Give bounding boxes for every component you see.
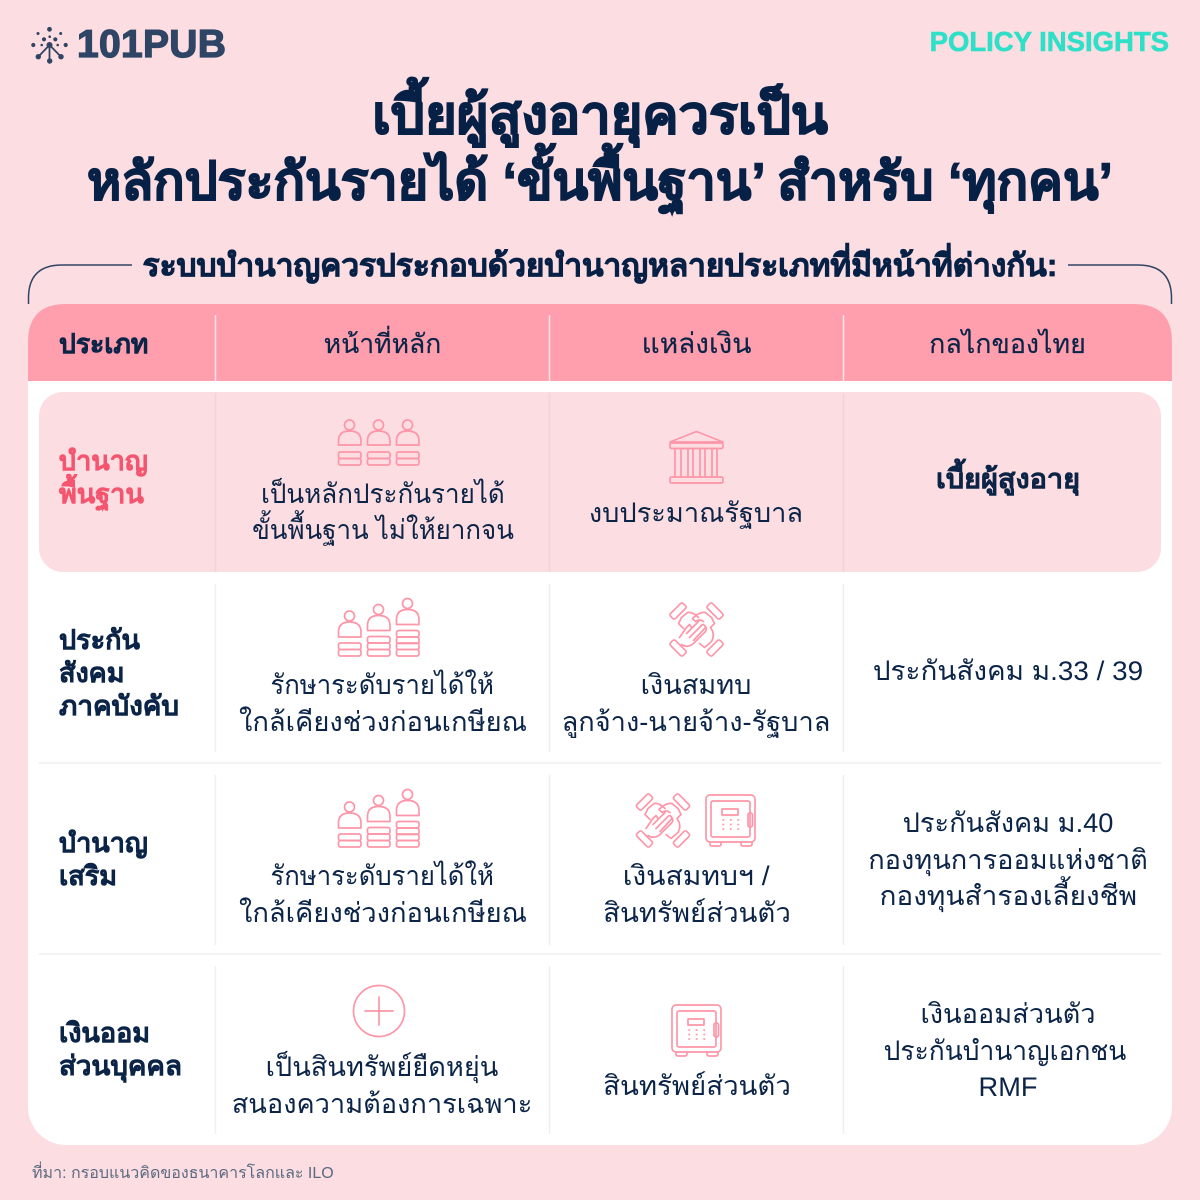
row 3 function text: ใกล้เคียงช่วงก่อนเกษียณ bbox=[239, 897, 526, 928]
row 2 funding text bbox=[562, 669, 830, 738]
title: เบี้ยผู้สูงอายุควรเป็น bbox=[372, 87, 828, 145]
row 4 funding text: สินทรัพย์ส่วนตัว bbox=[603, 1070, 790, 1101]
row 3 Thai mechanism bbox=[868, 807, 1148, 912]
row 1 funding text: งบประมาณรัฐบาล bbox=[589, 497, 803, 528]
row 1 Thai mechanism: เบี้ยผู้สูงอายุ bbox=[936, 463, 1080, 494]
row 2 Thai mechanism: ประกันสังคม ม.33 / 39 bbox=[872, 655, 1143, 686]
row 3 funding text bbox=[603, 860, 790, 928]
row 2 label: ประกัน bbox=[59, 625, 140, 655]
row 1 function text: เป็นหลักประกันรายได้ bbox=[261, 478, 504, 508]
row 3 label bbox=[59, 828, 148, 891]
row 4 label: เงินออม bbox=[59, 1018, 150, 1048]
row 3 Thai mechanism: ประกันสังคม ม.40 bbox=[903, 807, 1113, 838]
row 4 function text bbox=[232, 1050, 532, 1119]
table header: แหล่งเงิน bbox=[642, 328, 751, 359]
label: Policy Insights: POLICY INSIGHTS bbox=[930, 26, 1169, 57]
row 1 label bbox=[58, 446, 148, 512]
row 3 funding text: สินทรัพย์ส่วนตัว bbox=[603, 897, 790, 928]
row 2 function text: รักษาระดับรายได้ให้ bbox=[271, 669, 494, 700]
subtitle: ระบบบำนาญควรประกอบด้วยบำนาญหลายประเภทที่มีหน้าที่ต่างกัน: bbox=[143, 247, 1057, 283]
row 3 label: เสริม bbox=[59, 861, 117, 891]
row 4 function text: สนองความต้องการเฉพาะ bbox=[232, 1088, 532, 1119]
row 3 function text: รักษาระดับรายได้ให้ bbox=[271, 860, 494, 891]
row 4 label bbox=[59, 1018, 182, 1083]
row 4 Thai mechanism: ประกันบำนาญเอกชน bbox=[884, 1034, 1126, 1066]
row 3 function text bbox=[239, 860, 526, 928]
row 4 function text: เป็นสินทรัพย์ยืดหยุ่น bbox=[266, 1051, 498, 1082]
table header: กลไกของไทย bbox=[929, 329, 1086, 359]
row 1 label: พื้นฐาน bbox=[59, 479, 144, 509]
row 1 function text: ขั้นพื้นฐาน ไม่ให้ยากจน bbox=[252, 514, 513, 545]
row 3 funding text: เงินสมทบฯ / bbox=[623, 860, 770, 891]
row 4 label: ส่วนบุคคล bbox=[59, 1051, 182, 1081]
title: หลักประกันรายได้ ‘ขั้นพื้นฐาน’ สำหรับ ‘ทุกคน’ bbox=[87, 153, 1113, 211]
row 4 Thai mechanism: เงินออมส่วนตัว bbox=[920, 998, 1096, 1029]
row 3 Thai mechanism: กองทุนการออมแห่งชาติ bbox=[868, 844, 1148, 874]
row 2 label: ภาคบังคับ bbox=[59, 691, 179, 721]
source note: ที่มา: กรอบแนวคิดของธนาคารโลกและ ILO bbox=[32, 1165, 334, 1182]
row 3: supplementary pension bbox=[59, 788, 1148, 928]
row 4 Thai mechanism: RMF bbox=[979, 1071, 1037, 1102]
row 4 Thai mechanism bbox=[884, 998, 1126, 1102]
row 1 function text bbox=[252, 478, 514, 546]
row 1: basic pension bbox=[58, 419, 1080, 546]
title bbox=[87, 76, 1113, 217]
row 2 label bbox=[59, 625, 179, 721]
row 2 function text: ใกล้เคียงช่วงก่อนเกษียณ bbox=[239, 706, 526, 737]
row 1 label: บำนาญ bbox=[59, 446, 148, 476]
table header: ประเภท bbox=[59, 329, 148, 359]
logo: 101PUB: 101PUB bbox=[77, 23, 226, 66]
row 4: personal savings bbox=[59, 984, 1126, 1119]
row 3 label: บำนาญ bbox=[59, 828, 148, 858]
row 2 funding text: เงินสมทบ bbox=[641, 669, 751, 700]
row 2 funding text: ลูกจ้าง-นายจ้าง-รัฐบาล bbox=[562, 706, 830, 737]
row 2 label: สังคม bbox=[59, 658, 125, 688]
row 2: mandatory social insurance bbox=[59, 598, 1143, 738]
row 3 Thai mechanism: กองทุนสำรองเลี้ยงชีพ bbox=[879, 880, 1137, 911]
table header: หน้าที่หลัก bbox=[324, 329, 441, 359]
table header bbox=[59, 326, 1086, 359]
row 2 function text bbox=[239, 669, 526, 737]
